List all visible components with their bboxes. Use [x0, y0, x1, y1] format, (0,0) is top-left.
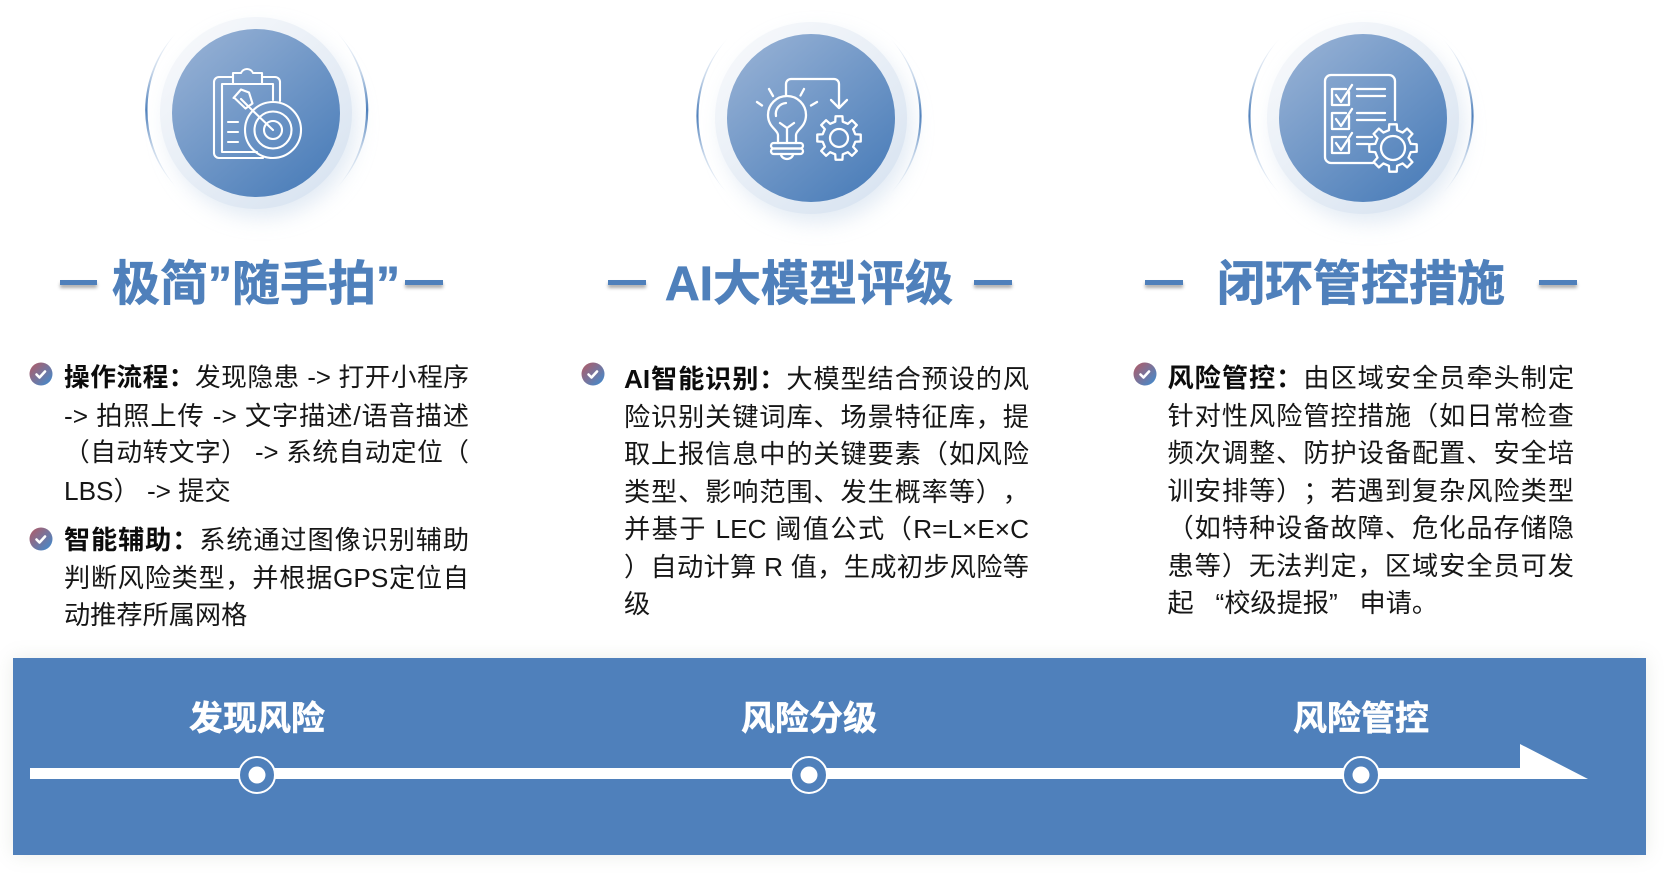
- timeline label: 风险管控: 风险管控: [1293, 700, 1429, 738]
- timeline band background: [13, 658, 1646, 855]
- text block: AI智能识别: 取上报信息中的关键要素（如风险: [624, 439, 1029, 469]
- heading dash left 1: [60, 280, 97, 284]
- bullet check: 操作流程: [30, 362, 52, 386]
- text block: 操作流程: 操作流程：发现隐患 -> 打开小程序: [64, 364, 469, 392]
- timeline label: 发现风险: 发现风险: [189, 700, 325, 738]
- bullet check: 智能辅助: [30, 528, 52, 550]
- text block: 风险管控: 风险管控：由区域安全员牵头制定: [1168, 363, 1574, 393]
- icon badge: light bulb and gear: [696, 22, 922, 222]
- icon badge: checklist and gear: [1248, 22, 1474, 222]
- text block: 风险管控: [1168, 363, 1574, 618]
- timeline arrow: [30, 744, 1588, 779]
- text block: 风险管控: 起 “校级提报” 申请。: [1168, 588, 1438, 618]
- text block: 风险管控: 患等）无法判定，区域安全员可发: [1168, 550, 1574, 580]
- text block: 风险管控: 训安排等）；若遇到复杂风险类型: [1168, 476, 1574, 506]
- icon badge: clipboard with target: [145, 17, 368, 217]
- text block: AI智能识别: 险识别关键词库、场景特征库，提: [624, 402, 1029, 432]
- text block: AI智能识别: AI智能识别：大模型结合预设的风: [624, 364, 1029, 394]
- text block: 风险管控: 频次调整、防护设备配置、安全培: [1168, 438, 1574, 468]
- timeline label: 风险分级: 风险分级: [741, 700, 877, 738]
- timeline node: 风险管控: [1343, 757, 1379, 793]
- text block: AI智能识别: 并基于 LEC 阈值公式（R=L×E×C: [624, 514, 1029, 544]
- text block: 风险管控: 针对性风险管控措施（如日常检查: [1168, 400, 1574, 430]
- bullet check: 风险管控: [1134, 362, 1156, 386]
- timeline node: 发现风险: [239, 757, 275, 793]
- timeline node: 风险分级: [791, 757, 827, 793]
- text block: 风险管控: （如特种设备故障、危化品存储隐: [1168, 513, 1574, 543]
- text block: AI智能识别: 类型、影响范围、发生概率等），: [624, 476, 1029, 506]
- heading dash left 3: [1145, 280, 1183, 284]
- heading: 极简随手拍: 极简”随手拍”: [112, 258, 400, 311]
- text block: 操作流程: [64, 364, 469, 506]
- text block: AI智能识别: [624, 364, 1029, 619]
- text block: AI智能识别: 级: [624, 589, 650, 619]
- text block: 操作流程: （自动转文字） -> 系统自动定位（: [64, 439, 469, 467]
- heading dash right 2: [974, 280, 1012, 284]
- heading dash right 3: [1539, 280, 1577, 284]
- heading dash left 2: [608, 280, 646, 284]
- text block: AI智能识别: ）自动计算 R 值，生成初步风险等: [624, 552, 1029, 582]
- heading: 闭环管控措施: 闭环管控措施: [1217, 258, 1505, 311]
- text block: 智能辅助: [64, 525, 469, 630]
- text block: 操作流程: LBS） -> 提交: [64, 476, 231, 506]
- text block: 智能辅助: 判断风险类型，并根据GPS定位自: [64, 562, 469, 592]
- text block: 智能辅助: 智能辅助：系统通过图像识别辅助: [64, 525, 469, 555]
- text block: 智能辅助: 动推荐所属网格: [64, 600, 247, 630]
- bullet check: AI智能识别: [582, 362, 604, 386]
- heading: AI大模型评级: AI大模型评级: [665, 258, 953, 311]
- heading dash right 1: [405, 280, 443, 284]
- text block: 操作流程: -> 拍照上传 -> 文字描述/语音描述: [64, 400, 469, 430]
